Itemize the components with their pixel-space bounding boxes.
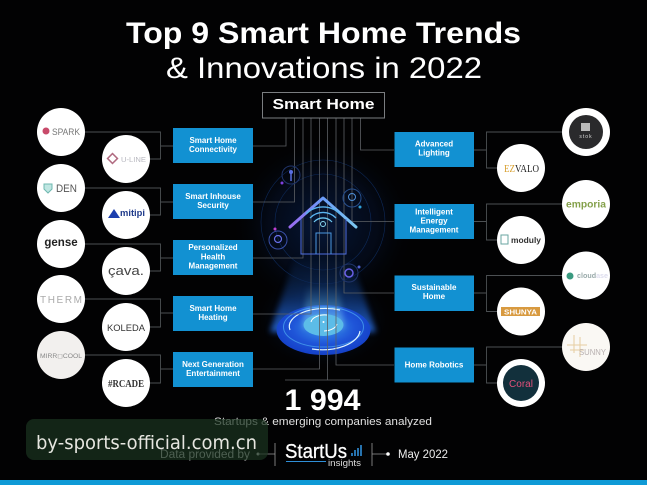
panel: trend boxes right: Home [423,292,446,301]
panel: trend boxes left: Management [189,262,238,270]
logo circles right outer column: SUNNY [579,348,607,357]
logo circles left column: DEN [56,183,77,195]
panel: trend boxes left: Health [201,252,225,262]
left connectors [85,132,173,383]
statistic: companies analyzed [214,384,432,428]
logo circles second column: #RCADE [108,379,144,390]
panel: trend boxes left: Smart Home [189,304,237,313]
panel: trend boxes right [394,132,474,382]
logo circles left column: MIRR◻COOL [40,353,82,360]
logo circles second column: çava. [108,263,144,278]
logo circles right inner column: moduly [511,235,541,245]
footer: data provided by: StartUs [285,441,347,463]
logo circles left column: THERM [40,295,82,306]
panel: trend boxes right: Energy [420,216,448,226]
panel: trend boxes left: Connectivity [189,145,238,154]
title: & Innovations in 2022 [166,52,482,85]
logo circles right inner column: Coral [509,379,533,390]
logo circles second column [102,135,150,407]
footer: data provided by: May 2022 [398,449,448,461]
logo circles right outer column: emporia [566,198,606,210]
title: Top 9 Smart Home Trends [126,17,521,50]
panel: trend boxes left: Security [197,201,229,210]
footer: data provided by: Data provided by [160,449,250,461]
footer: data provided by: insights [328,458,362,468]
icon: house with wifi [290,198,356,254]
watermark: by-sports-official.com.cn [36,432,257,454]
logo circles right inner column: SHUNYA [504,310,537,316]
logo circles second column: KOLEDA [107,323,146,334]
panel: trend boxes left: Entertainment [186,369,240,378]
bottom blue band [0,480,647,485]
central illustration: smart home hologram [231,137,415,370]
logo circles right outer column: cloudase [577,271,608,280]
panel: trend boxes left: Smart Home [189,136,237,145]
title [126,17,521,85]
panel: trend boxes right: Home Robotics [405,360,464,370]
logo circles right inner column: EZVALO [504,163,539,175]
heading box: Smart Home: Smart Home [272,97,374,113]
statistic: companies analyzed: Startups & emerging companies analyzed [214,416,432,428]
panel: trend boxes right: Sustainable [412,283,457,292]
logo circles left column [37,108,85,379]
statistic: companies analyzed: 1 994 [284,384,361,417]
right connectors [474,132,562,383]
connector lines from Smart Home box [253,118,394,380]
icon: floating smart devices [269,166,362,282]
panel: trend boxes right: Intelligent [415,208,453,216]
panel: trend boxes left: Heating [198,313,228,322]
logo circles left column: gense [44,237,78,249]
logo circles right inner column [497,144,545,407]
panel: trend boxes left [173,128,253,387]
panel: trend boxes left: Personalized [188,243,238,252]
footer: data provided by [160,441,448,468]
panel: trend boxes left: Smart Inhouse [185,192,241,201]
panel: trend boxes left: Next Generation [182,360,244,369]
heading box: Smart Home [262,92,384,118]
logo circles right outer column: stok [579,134,593,140]
panel: trend boxes right: Lighting [418,148,450,158]
logo circles right outer column [562,108,610,371]
panel: trend boxes right: Advanced [415,140,453,148]
watermark [26,419,268,460]
logo circles second column: mitipi [120,208,145,218]
logo circles second column: U-LINE [121,155,146,164]
logo circles left column: SPARK [52,127,80,137]
panel: trend boxes right: Management [410,226,459,234]
